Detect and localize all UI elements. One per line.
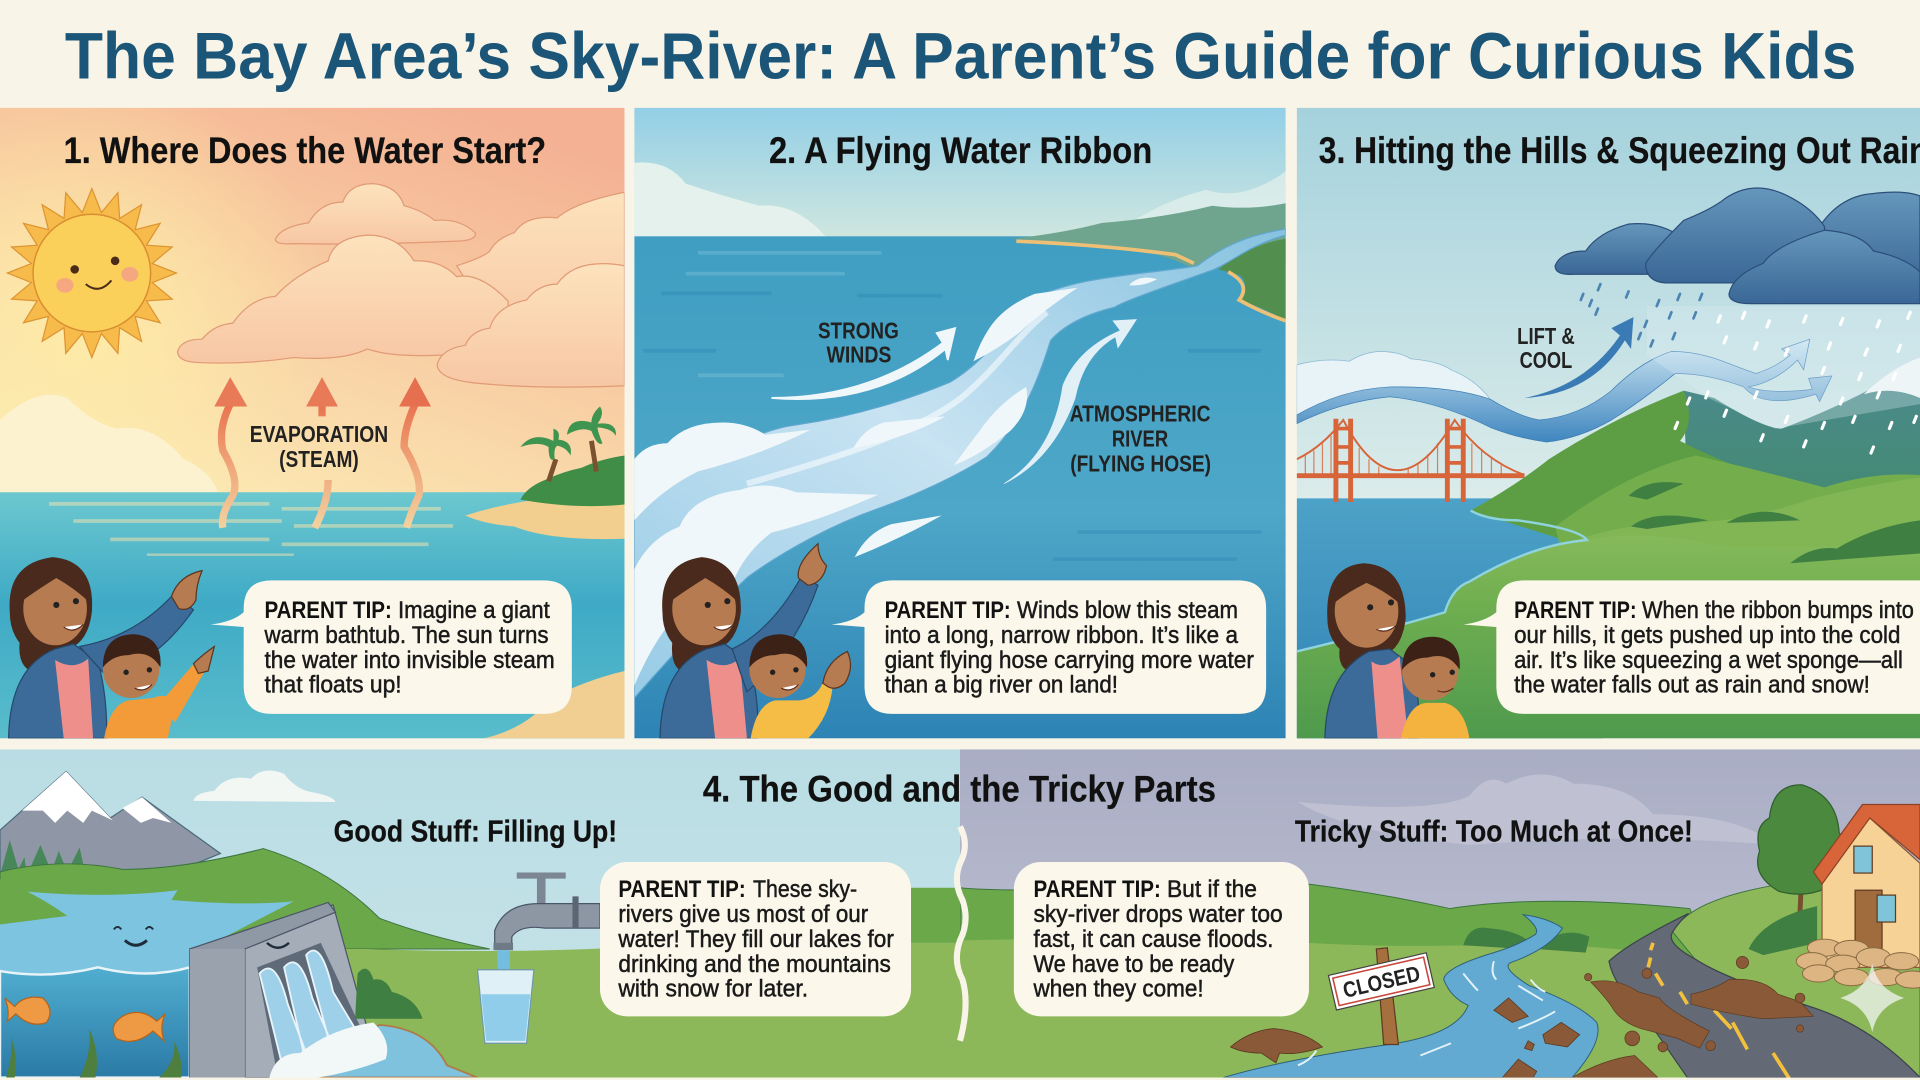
callout: parent tip 3: the water falls out as rain and snow! bbox=[1514, 672, 1870, 699]
lake bbox=[0, 889, 294, 980]
callout: parent tip 4 good: PARENT TIP: bbox=[618, 876, 746, 903]
green hills bbox=[1297, 391, 1920, 738]
bushes bbox=[1463, 928, 1589, 953]
callout: parent tip 3 bbox=[1463, 580, 1920, 714]
smiling water face bbox=[114, 927, 153, 945]
label: strong winds: WINDS bbox=[827, 341, 891, 367]
golden gate bridge bbox=[1297, 419, 1524, 502]
panel 4 left: good stuff bbox=[0, 749, 960, 1078]
tree bbox=[1749, 785, 1847, 955]
underwater section bbox=[0, 967, 190, 1078]
icon: sparkle bbox=[1840, 964, 1904, 1032]
bay bbox=[1297, 498, 1603, 738]
figures: parent and child bbox=[1325, 563, 1469, 738]
callout: parent tip 4 good: water! They fill our lakes for bbox=[617, 926, 894, 953]
flooding river bbox=[1223, 915, 1598, 1078]
clouds bbox=[178, 184, 624, 387]
rain bbox=[1581, 284, 1920, 453]
sign: closed: CLOSED bbox=[1340, 961, 1422, 1003]
callout: parent tip 4 tricky bbox=[1014, 862, 1309, 1016]
atmospheric river ribbon bbox=[634, 229, 1286, 698]
sea bbox=[634, 236, 1286, 738]
trees bbox=[1, 840, 84, 872]
callout: parent tip 1: warm bathtub. The sun turns bbox=[264, 622, 549, 649]
faucet and glass bbox=[478, 876, 600, 1043]
callout: parent tip 2: giant flying hose carrying more water bbox=[885, 647, 1254, 674]
callout: parent tip 4 tricky: sky-river drops water too bbox=[1033, 901, 1283, 928]
figures: parent and child bbox=[9, 557, 214, 738]
panel 1: where does the water start bbox=[0, 73, 624, 738]
figures: parent and child bbox=[660, 544, 850, 738]
label: lift and cool: LIFT & bbox=[1517, 323, 1575, 349]
arrow: strong winds bbox=[771, 328, 955, 399]
label: atmospheric river: (FLYING HOSE) bbox=[1070, 450, 1211, 476]
clouds on ribbon bbox=[634, 278, 1157, 686]
storm cloud bbox=[1298, 774, 1776, 845]
heading 4: 4. The Good and the Tricky Parts bbox=[703, 769, 1216, 810]
subheading: good stuff: Good Stuff: Filling Up! bbox=[334, 815, 617, 849]
icon: palm island bbox=[465, 407, 624, 539]
sea bbox=[0, 492, 624, 738]
arrows: evaporation bbox=[214, 377, 431, 528]
fish bbox=[5, 997, 165, 1041]
house bbox=[1813, 804, 1920, 967]
green hill bbox=[0, 849, 490, 949]
callout: parent tip 1: the water into invisible steam bbox=[264, 647, 555, 674]
icon: sun bbox=[7, 189, 176, 358]
label: atmospheric river: RIVER bbox=[1112, 426, 1168, 452]
small cloud bbox=[193, 771, 336, 802]
hills bbox=[960, 884, 1714, 967]
callout: parent tip 1: that floats up! bbox=[264, 672, 402, 699]
dam bbox=[190, 902, 367, 1078]
callout: parent tip 2: PARENT TIP: bbox=[885, 597, 1011, 624]
callout: parent tip 4 good: with snow for later. bbox=[617, 976, 808, 1003]
bush bbox=[355, 969, 422, 1019]
label: strong winds bbox=[818, 322, 898, 362]
label: lift and cool: COOL bbox=[1520, 347, 1572, 373]
label: atmospheric river: ATMOSPHERIC bbox=[1070, 401, 1211, 427]
callout: parent tip 1: Imagine a giant bbox=[398, 597, 550, 624]
right hill bbox=[1673, 882, 1920, 1078]
label: evaporation bbox=[251, 426, 387, 472]
callout: parent tip 2: Winds blow this steam bbox=[1017, 597, 1238, 624]
wavy divider bbox=[957, 827, 966, 1041]
callout: parent tip 2: than a big river on land! bbox=[885, 672, 1118, 699]
label: atmospheric river bbox=[1070, 401, 1211, 476]
snowy mountain bbox=[1684, 390, 1920, 488]
panel 3: hitting the hills bbox=[1297, 108, 1920, 738]
callout: parent tip 4 good: These sky- bbox=[753, 876, 857, 903]
heading: 2. A Flying Water Ribbon bbox=[769, 130, 1152, 171]
title: The Bay Area’s Sky-River: A Parent’s Guide for Curious Kids bbox=[65, 19, 1856, 93]
callout: parent tip 4 good bbox=[600, 862, 911, 1016]
ribbon and arrows bbox=[1297, 317, 1832, 442]
callout: parent tip 3: our hills, it gets pushed up into the cold bbox=[1514, 622, 1900, 649]
arrow: flying hose bbox=[1004, 320, 1136, 484]
label: strong winds: STRONG bbox=[818, 318, 899, 344]
callout: parent tip 4 tricky: We have to be ready bbox=[1033, 951, 1234, 978]
callout: parent tip 4 tricky: PARENT TIP: bbox=[1033, 876, 1161, 903]
callout: parent tip 2: into a long, narrow ribbon. It’s like a bbox=[885, 622, 1239, 649]
callout: parent tip 4 tricky: But if the bbox=[1167, 876, 1257, 903]
mud on road bbox=[1572, 956, 1813, 1078]
outflow water bbox=[282, 1025, 478, 1078]
label: lift and cool bbox=[1518, 328, 1574, 368]
callout: parent tip 2 bbox=[831, 580, 1266, 714]
sign: closed bbox=[1328, 948, 1434, 1044]
callout: parent tip 1: PARENT TIP: bbox=[264, 597, 392, 624]
callout: parent tip 1 bbox=[211, 580, 572, 714]
label: evaporation: EVAPORATION bbox=[250, 421, 388, 447]
callout: parent tip 4 tricky: when they come! bbox=[1033, 976, 1204, 1003]
callout: parent tip 4 good: rivers give us most of our bbox=[618, 901, 868, 928]
storm clouds bbox=[1555, 188, 1920, 304]
distant land bbox=[1013, 203, 1286, 321]
heading: 1. Where Does the Water Start? bbox=[64, 130, 546, 171]
road bbox=[1609, 913, 1920, 1078]
callout: parent tip 4 tricky: fast, it can cause floods. bbox=[1033, 926, 1273, 953]
callout: parent tip 4 good: drinking and the mountains bbox=[618, 951, 891, 978]
mud rocks bbox=[1231, 998, 1580, 1078]
mountains bbox=[0, 770, 222, 872]
callout: parent tip 3: PARENT TIP: bbox=[1514, 597, 1637, 624]
subheading: tricky stuff: Tricky Stuff: Too Much at Once! bbox=[1295, 815, 1693, 849]
label: evaporation: (STEAM) bbox=[279, 446, 359, 472]
ground bbox=[346, 942, 960, 1078]
panel 4 right: tricky stuff bbox=[960, 749, 1920, 1080]
panel 2: a flying water ribbon bbox=[634, 108, 1286, 738]
sandbags bbox=[1796, 939, 1920, 988]
